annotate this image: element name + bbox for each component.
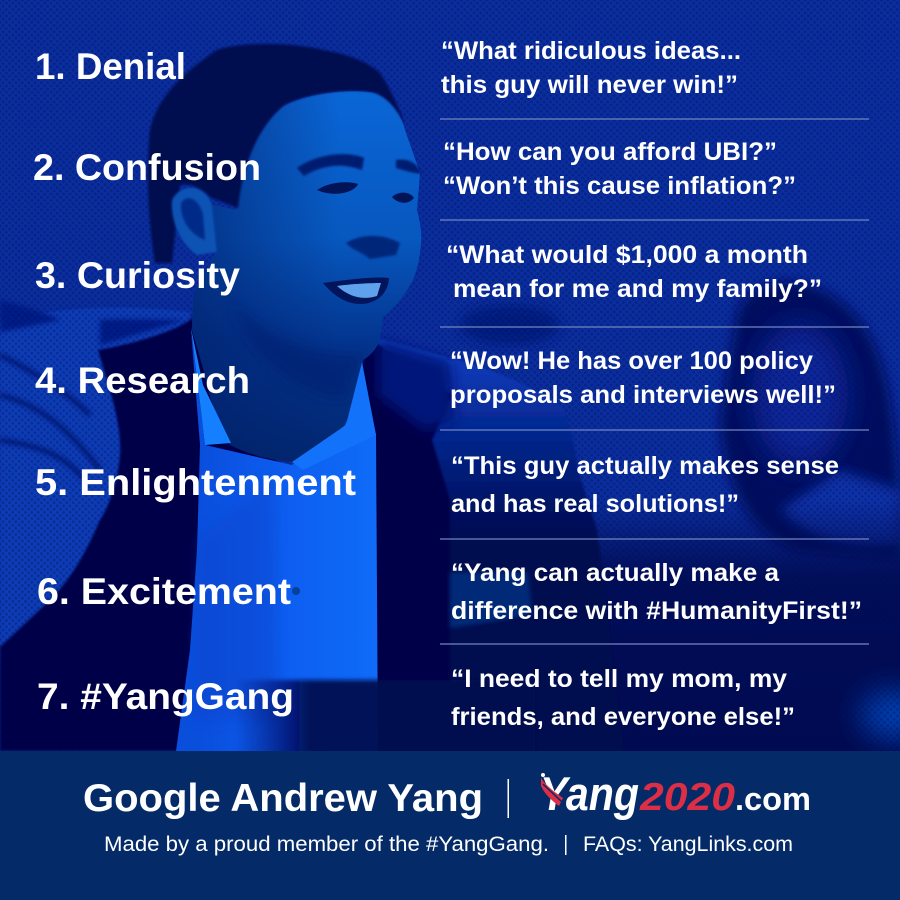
footer credits xyxy=(104,833,793,856)
stage 2: 2. Confusion xyxy=(33,147,261,188)
quotes xyxy=(441,37,862,731)
footer panel xyxy=(0,751,900,900)
brows xyxy=(297,154,364,176)
shirt xyxy=(176,330,378,751)
quote 2 xyxy=(443,138,796,200)
stage 3: 3. Curiosity xyxy=(35,255,240,296)
quote 5: and has real solutions!” xyxy=(451,490,739,518)
face and neck xyxy=(192,91,421,462)
quote 2: “How can you afford UBI?” xyxy=(443,138,777,166)
nose shadow xyxy=(346,236,400,259)
logo: Yang2020.com: Yang xyxy=(540,767,639,820)
quote 5: “This guy actually makes sense xyxy=(451,452,839,480)
logo: Yang2020.com: .com xyxy=(735,781,811,817)
quote 5 xyxy=(451,452,839,518)
footer heading: Google Andrew Yang xyxy=(83,777,483,820)
jacket dark body xyxy=(0,318,452,751)
stage 5: 5. Enlightenment xyxy=(35,462,356,503)
quote 6: difference with #HumanityFirst!” xyxy=(451,597,862,625)
lap shadow across lower frame xyxy=(235,680,535,755)
shirt fold shading xyxy=(195,470,278,720)
quote 7 xyxy=(451,665,795,731)
quote 3: “What would $1,000 a month xyxy=(446,241,808,269)
left background figure xyxy=(0,300,190,660)
eyes xyxy=(317,182,358,194)
stage list xyxy=(33,46,356,717)
quote 4: proposals and interviews well!” xyxy=(450,381,836,409)
quote 7: friends, and everyone else!” xyxy=(451,703,795,731)
badge on lap xyxy=(450,572,532,628)
stage 7: 7. #YangGang xyxy=(37,676,294,717)
stage 1: 1. Denial xyxy=(35,46,186,87)
stage 6: 6. Excitement xyxy=(37,571,291,612)
quote 1: “What ridiculous ideas... xyxy=(441,37,741,65)
quote 1 xyxy=(441,37,741,99)
logo: Yang2020.com xyxy=(540,767,811,820)
hair xyxy=(148,44,405,263)
collars xyxy=(191,328,231,445)
footer credits: Made by a proud member of the #YangGang. xyxy=(104,833,549,856)
background right figure xyxy=(420,282,900,760)
quote 6: “Yang can actually make a xyxy=(451,559,780,587)
quote 1: this guy will never win!” xyxy=(441,71,738,99)
quote 4: “Wow! He has over 100 policy xyxy=(450,347,813,375)
quote 2: “Won’t this cause inflation?” xyxy=(443,172,796,200)
jaw shadow xyxy=(230,300,365,400)
mouth xyxy=(323,277,389,304)
quote 7: “I need to tell my mom, my xyxy=(451,665,787,693)
quote 3: mean for me and my family?” xyxy=(453,275,822,303)
footer credits: FAQs: YangLinks.com xyxy=(583,833,793,856)
quote 3 xyxy=(446,241,822,303)
ear xyxy=(172,188,217,255)
logo: Yang2020.com: 2020 xyxy=(639,776,735,819)
jacket right shoulder and arm xyxy=(300,335,625,760)
stage 4: 4. Research xyxy=(35,360,250,401)
quote 6 xyxy=(451,559,862,625)
quote 4 xyxy=(450,347,836,409)
